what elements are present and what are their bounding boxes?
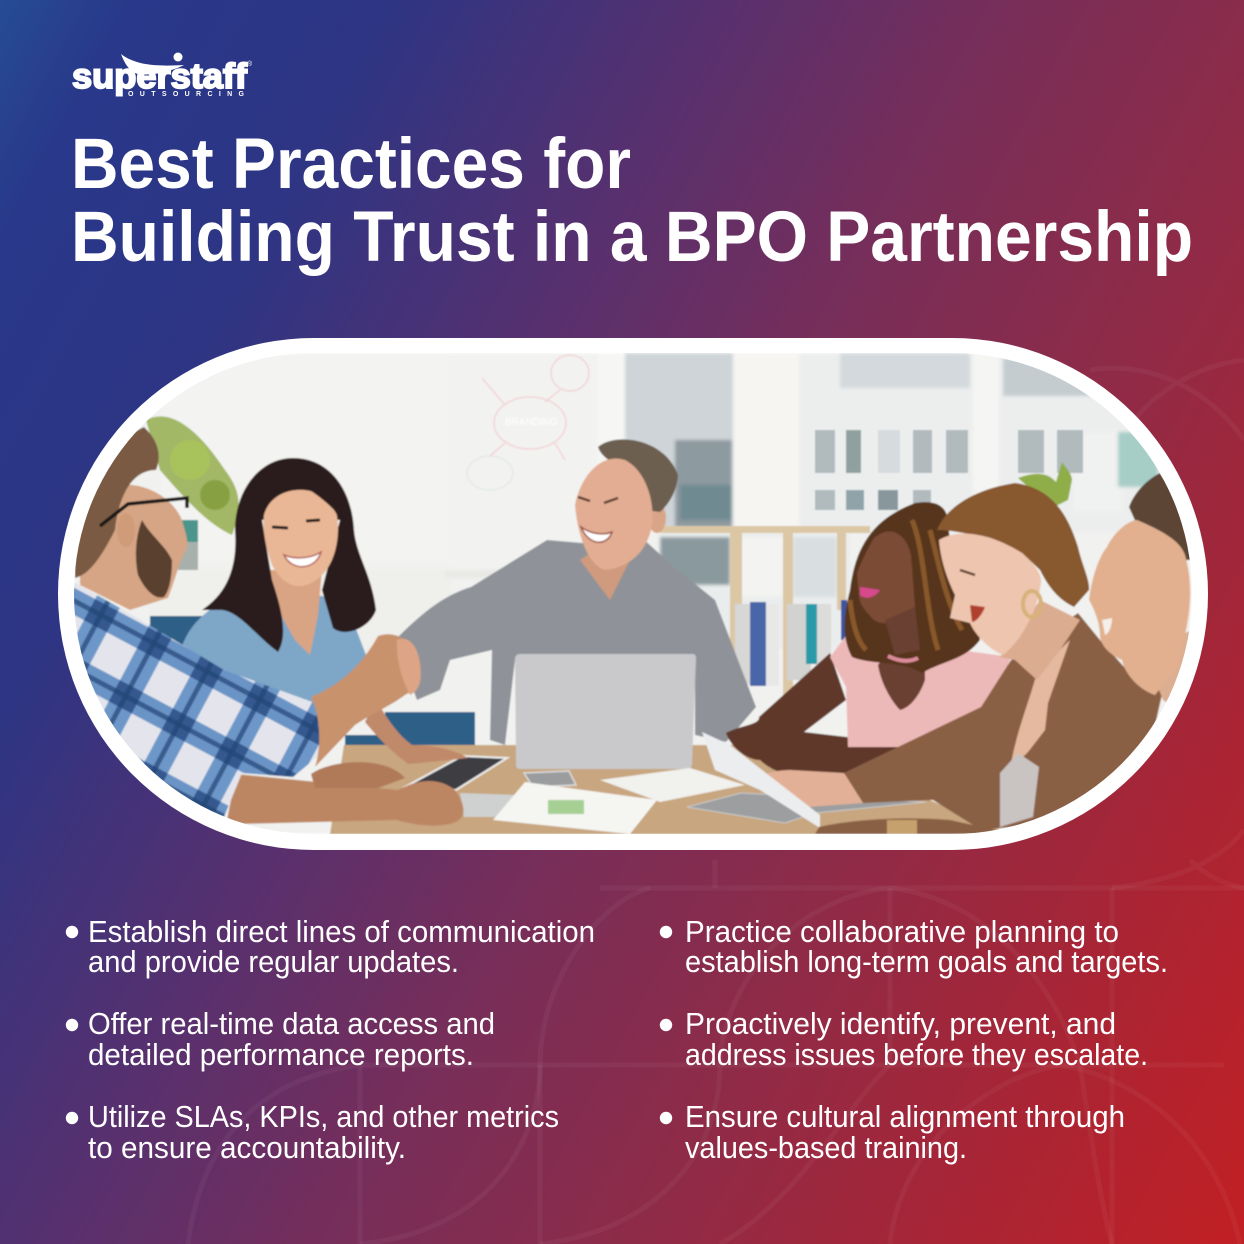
photo: team meeting with handshake — [40, 353, 1192, 850]
open smile — [581, 527, 612, 542]
beard — [136, 520, 172, 598]
bullet 1: Establish direct lines of communication — [88, 915, 595, 949]
woman's arm to table — [364, 708, 468, 764]
plant on right — [1018, 462, 1072, 508]
smile — [284, 552, 321, 567]
curly hair — [845, 502, 980, 673]
glasses — [100, 498, 187, 526]
neck — [885, 607, 920, 655]
blue sofa — [150, 616, 475, 755]
title line 2: Building Trust in a BPO Partnership — [71, 198, 1193, 277]
bullet 6: Ensure cultural alignment through — [685, 1100, 1125, 1134]
bullet 2: detailed performance reports. — [88, 1038, 474, 1072]
bullet 5 — [660, 1007, 1148, 1072]
building windows — [815, 430, 1083, 510]
face — [263, 490, 338, 586]
smile — [1102, 618, 1112, 635]
hand — [756, 770, 863, 807]
centre man's hand — [397, 639, 421, 695]
floral blouse — [1000, 753, 1039, 827]
woman in brown jacket — [687, 483, 1163, 834]
lips — [970, 605, 985, 622]
logo swoosh — [121, 54, 184, 75]
bullet list: left column — [66, 915, 595, 1165]
wireframe on paper — [548, 800, 584, 814]
bullet 6 — [660, 1100, 1125, 1165]
chest — [1010, 640, 1070, 770]
eye — [960, 570, 975, 575]
laptop — [515, 654, 696, 769]
neck — [1000, 600, 1080, 680]
bullet list: right column — [660, 915, 1168, 1165]
woman in pink top — [726, 502, 1011, 778]
face — [857, 531, 915, 623]
face — [939, 534, 1041, 655]
hair highlights — [850, 520, 962, 650]
bullet 5: Proactively identify, prevent, and — [685, 1007, 1116, 1041]
hair — [937, 483, 1089, 607]
bracelets — [887, 820, 917, 834]
plant on left — [146, 416, 239, 570]
bullet 3: Utilize SLAs, KPIs, and other metrics — [88, 1100, 559, 1134]
whiteboard mind map: BRANDING — [505, 417, 558, 428]
denim shirt — [182, 595, 366, 703]
brown jacket — [844, 613, 1163, 830]
face — [575, 459, 653, 570]
arm and hand — [726, 653, 940, 778]
woman with denim shirt — [180, 458, 376, 710]
ear — [650, 508, 667, 534]
bullet 4 — [660, 915, 1168, 979]
pink top — [830, 633, 1011, 747]
logo dot — [174, 52, 182, 62]
sheet held — [702, 732, 820, 828]
phone — [524, 771, 576, 787]
photo frame: white pill border — [58, 338, 1208, 850]
hair — [202, 458, 376, 652]
bullet 1: and provide regular updates. — [88, 945, 459, 979]
logo wordmark: superstaff — [72, 57, 247, 96]
bullet 2 — [66, 1007, 495, 1072]
man's head: skin — [80, 485, 187, 610]
neck and shoulder — [1125, 630, 1192, 720]
second paper — [600, 768, 745, 802]
hair — [1129, 473, 1192, 560]
forearm and handshake — [311, 634, 421, 767]
bullet 3 — [66, 1100, 559, 1165]
eyes — [272, 520, 320, 528]
back hair — [74, 427, 159, 578]
bullet 2: Offer real-time data access and — [88, 1007, 495, 1041]
neck and chest — [270, 570, 322, 655]
bottom arm with bracelets — [815, 818, 996, 834]
logo registered mark: ® — [247, 60, 253, 68]
plaid shirt — [40, 582, 322, 850]
hoop earring — [1023, 591, 1041, 617]
logo tagline: OUTSOURCING — [128, 91, 245, 98]
woman's hand on table — [311, 762, 405, 788]
hair — [598, 439, 678, 512]
chest — [878, 655, 925, 710]
title line 1: Best Practices for — [71, 125, 631, 204]
bullet 4: Practice collaborative planning to — [685, 915, 1119, 949]
grey shirt — [395, 536, 756, 745]
bullet 5: address issues before they escalate. — [685, 1038, 1148, 1072]
woman at far right — [1089, 473, 1192, 720]
title — [71, 125, 1193, 277]
hair parting — [312, 490, 338, 514]
table items — [405, 756, 745, 834]
bullet 1 — [66, 915, 595, 979]
shelf with books — [660, 526, 870, 700]
left man in plaid shirt — [74, 426, 468, 826]
lips — [860, 587, 880, 598]
centre man in grey shirt — [395, 439, 756, 745]
neck — [580, 554, 630, 600]
bullet 4: establish long-term goals and targets. — [685, 945, 1168, 979]
whiteboard mind map — [467, 355, 589, 490]
bullet 6: values-based training. — [685, 1131, 967, 1165]
office background — [74, 353, 1192, 834]
paper with wireframes — [493, 782, 657, 834]
decorative line pattern — [188, 360, 1244, 1244]
eyes — [578, 497, 618, 503]
ear — [117, 513, 135, 547]
man's lower forearm — [225, 774, 463, 830]
table — [330, 745, 1000, 834]
tablet under paper — [460, 793, 518, 817]
logo: Superstaff Outsourcing — [72, 52, 253, 98]
tablet under arm — [687, 793, 926, 823]
choker — [888, 656, 918, 661]
bullet 3: to ensure accountability. — [88, 1131, 406, 1165]
tablet — [405, 756, 507, 790]
face — [1089, 520, 1190, 695]
